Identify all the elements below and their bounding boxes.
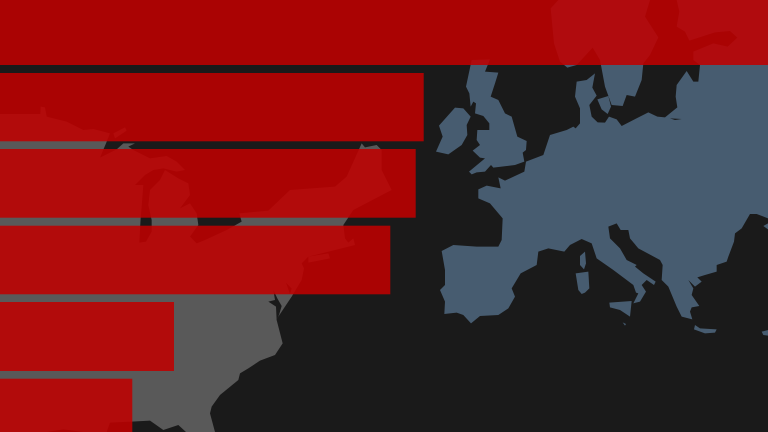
bar 6 <box>0 379 132 432</box>
bar 4 <box>0 226 390 294</box>
bar 3 <box>0 149 416 218</box>
bar 5 <box>0 302 174 371</box>
Chesapeake Bay <box>268 290 282 321</box>
Baltic sliver <box>670 118 682 120</box>
bar 1 <box>0 0 768 65</box>
Sicily <box>609 301 632 317</box>
bar 2 <box>0 73 424 141</box>
map: eastern United States <box>0 107 392 432</box>
Scandinavia <box>551 0 658 106</box>
map: Europe <box>436 0 768 336</box>
island: Isle Royale <box>113 127 127 138</box>
Corsica <box>580 252 586 269</box>
Anatolia edge <box>762 330 768 336</box>
Zealand <box>597 96 611 114</box>
Crete <box>694 325 717 333</box>
Ireland <box>436 108 471 154</box>
island: Long Island <box>308 253 330 263</box>
Great Britain <box>466 59 527 174</box>
Sardinia <box>576 272 589 294</box>
mainland Europe <box>440 0 768 323</box>
Malta <box>623 322 626 326</box>
Delaware Bay <box>286 283 292 294</box>
Turkey sliver <box>763 223 768 229</box>
